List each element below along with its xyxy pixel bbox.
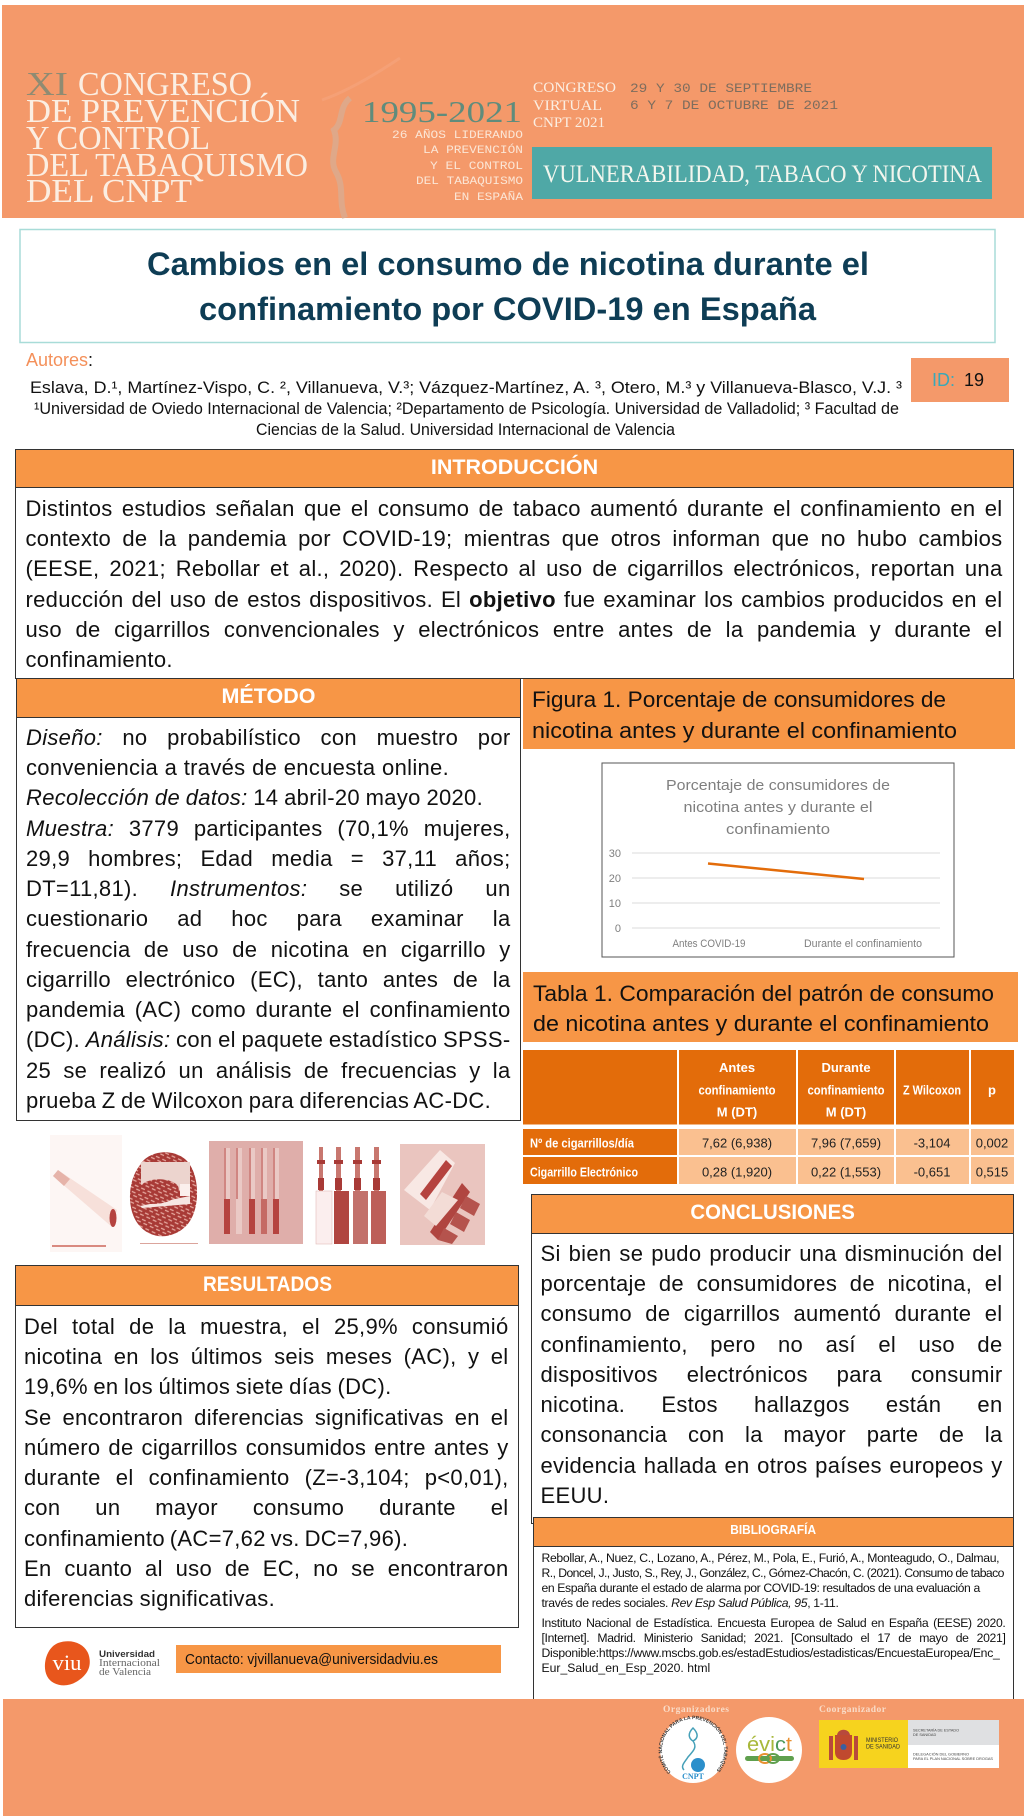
header banner — [2, 5, 1024, 218]
chart axis labels: 20 — [609, 873, 621, 885]
table data: 0,22 (1,553) — [811, 1164, 881, 1180]
viu university logo: Internacional — [99, 1658, 160, 1669]
table header row: confinamiento — [698, 1082, 776, 1098]
text: resultados: durante el confinamiento (Z=-3,104; p<0,01), — [24, 1465, 508, 1490]
text: introducción: uso de cigarrillos convencionales y electrónicos entre antes de la pandemia y durante el — [26, 617, 1002, 642]
banner years — [362, 94, 523, 204]
logo: CNPT — [658, 1716, 728, 1783]
text: método: pandemia (AC) como durante el confinamiento — [26, 997, 510, 1022]
id box — [911, 358, 1009, 402]
text: conclusiones: evidencia hallada en otros países europeos y — [540, 1453, 1002, 1478]
text: references: en España durante el estado de alarma por COVID-19: resultados de una evaluación a — [542, 1580, 980, 1594]
panel: conclusiones — [531, 1194, 1014, 1524]
banner theme box: VULNERABILIDAD, TABACO Y NICOTINA — [543, 161, 982, 188]
text: introducción: confinamiento. — [26, 647, 173, 672]
logo: evict: évict — [747, 1734, 792, 1756]
chart title: confinamiento — [726, 821, 830, 838]
contact box: Contacto: vjvillanueva@universidadviu.es — [185, 1651, 438, 1668]
text: references: Eur_Salud_en_Esp_2020. html — [542, 1660, 710, 1674]
figure caption: nicotina antes y durante el confinamiento — [532, 718, 957, 743]
heading: bibliografía — [534, 1518, 1013, 1547]
authors — [26, 350, 902, 439]
chart title — [666, 777, 890, 838]
photo: vape pens — [209, 1141, 303, 1244]
panel: resultados — [15, 1265, 519, 1628]
table header row: Antes — [719, 1060, 755, 1075]
text: resultados: Del total de la muestra, el 25,9% consumió — [24, 1314, 508, 1339]
product photos — [50, 1135, 485, 1252]
heading: método: MÉTODO — [222, 684, 315, 708]
text: método: conveniencia a través de encuesta online. — [26, 755, 449, 780]
text: conclusiones: Si bien se pudo producir una disminución del — [540, 1241, 1002, 1266]
chart axis labels — [609, 848, 922, 950]
chart axis labels: 0 — [615, 923, 621, 935]
chart title: Porcentaje de consumidores de — [666, 777, 890, 794]
text: introducción: reducción del uso de estos dispositivos. El objetivo fue examinar los cambios producidos en el — [26, 587, 1002, 612]
authors: Eslava, D.¹, Martínez-Vispo, C. ², Villanueva, V.³; Vázquez-Martínez, A. ³, Otero, M.³ y Villanueva-Blasco, V.J. ³ — [30, 378, 902, 397]
banner virtual congress dates — [533, 80, 838, 131]
coat of arms — [829, 1730, 858, 1760]
text: método: cuestionario ad hoc para examinar la — [26, 906, 510, 931]
heading: conclusiones — [532, 1195, 1013, 1234]
chart title: nicotina antes y durante el — [684, 799, 872, 816]
footer headings — [663, 1705, 887, 1715]
text: introducción — [26, 496, 1002, 672]
banner virtual congress dates: 29 Y 30 DE SEPTIEMBRE — [630, 81, 812, 96]
text: references: Rebollar, A., Nuez, C., Lozano, A., Pérez, M., Pola, E., Furió, A., Monteagudo, O., Dalmau, — [542, 1550, 999, 1564]
chart axis labels: Antes COVID-19 — [672, 938, 746, 950]
logo: ministerio de sanidad: MINISTERIO — [866, 1737, 898, 1744]
heading: resultados — [16, 1266, 518, 1306]
viu university logo — [45, 1641, 160, 1685]
table header row: p — [988, 1082, 996, 1098]
panel: introducción — [15, 449, 1014, 679]
text: resultados: Se encontraron diferencias significativas en el — [24, 1405, 508, 1430]
logo: ministerio de sanidad: PARA EL PLAN NACIONAL SOBRE DROGAS — [913, 1757, 993, 1761]
logo: ministerio de sanidad: DELEGACIÓN DEL GOBIERNO — [913, 1752, 969, 1756]
text: resultados: con un mayor consumo durante el — [24, 1495, 508, 1520]
text: references — [542, 1550, 1006, 1674]
table data: -0,651 — [914, 1164, 950, 1180]
table caption — [523, 972, 1018, 1042]
banner congress title: CONGRESO — [78, 66, 252, 103]
banner congress title: Y CONTROL — [26, 120, 210, 157]
banner congress title: XI — [26, 66, 68, 103]
text: references: [Internet]. Madrid. Ministerio Sanidad; 2021. [Consultado el 17 de mayo de 2021] — [542, 1630, 1006, 1644]
table caption: de nicotina antes y durante el confinamiento — [533, 1011, 989, 1036]
text: references: R., Doncel, J., Justo, S., Rey, J., González, C., Gómez-Chacón, C. (2021). Consumo de tabaco — [542, 1566, 1004, 1580]
photo: pod device kit — [400, 1144, 485, 1245]
text: references: Instituto Nacional de Estadística. Encuesta Europea de Salud en España (EESE) 2020. — [542, 1616, 1006, 1630]
heading: introducción: INTRODUCCIÓN — [431, 455, 598, 479]
text: conclusiones: dispositivos electrónicos para consumir — [540, 1362, 1002, 1387]
heading: bibliografía: BIBLIOGRAFÍA — [731, 1523, 816, 1537]
text: introducción: (EESE, 2021; Rebollar et al., 2020). Respecto al uso de cigarrillos electrónicos, reportan una — [26, 556, 1002, 581]
text: resultados — [24, 1314, 508, 1611]
banner congress title: DEL TABAQUISMO — [26, 147, 308, 184]
contact box — [176, 1645, 501, 1673]
photo: vape mods — [316, 1147, 386, 1244]
data line — [708, 864, 864, 879]
figure caption — [523, 679, 1015, 749]
text: resultados: En cuanto al uso de EC, no se encontraron — [24, 1556, 508, 1581]
viu university logo: de Valencia — [99, 1667, 152, 1678]
id box: 19 — [964, 370, 984, 390]
table header row: M (DT) — [717, 1104, 757, 1120]
logo: CNPT: CNPT — [682, 1772, 705, 1781]
text: método: Muestra: 3779 participantes (70,1% mujeres, — [26, 816, 510, 841]
logo: ministerio de sanidad: DE SANIDAD — [913, 1733, 936, 1737]
title: confinamiento por COVID-19 en España — [199, 291, 816, 327]
logo: ministerio de sanidad — [819, 1720, 999, 1768]
id box: ID: — [932, 370, 955, 390]
title: Cambios en el consumo de nicotina durante el — [147, 246, 869, 282]
table row labels: Cigarrillo Electrónico — [530, 1164, 638, 1180]
title — [20, 230, 995, 342]
banner years: 1995-2021 — [362, 94, 522, 129]
chart axis labels: 30 — [609, 848, 621, 860]
table header row: confinamiento — [808, 1082, 885, 1098]
banner congress title: DE PREVENCIÓN — [26, 92, 300, 130]
text: método: Recolección de datos: 14 abril-20 mayo 2020. — [26, 785, 483, 810]
text: conclusiones: EEUU. — [540, 1483, 609, 1508]
text: método: cigarrillo electrónico (EC), tanto antes de la — [26, 967, 510, 992]
logo: ministerio de sanidad: DE SANIDAD — [866, 1744, 900, 1750]
panel: método — [16, 678, 521, 1121]
logo: CNPT: COMITÉ NACIONAL PARA LA PREVENCIÓN DEL TABAQUISMO — [658, 1716, 728, 1774]
text: conclusiones: consonancia con la mayor parte de la — [540, 1422, 1002, 1447]
heading: resultados: RESULTADOS — [203, 1272, 331, 1296]
text: método: prueba Z de Wilcoxon para diferencias AC-DC. — [26, 1088, 491, 1113]
figure caption: Figura 1. Porcentaje de consumidores de — [532, 687, 946, 712]
banner virtual congress dates: CONGRESO — [533, 80, 616, 96]
panel: bibliografía — [533, 1517, 1014, 1707]
text: references: través de redes sociales. Rev Esp Salud Pública, 95, 1-11. — [542, 1596, 839, 1610]
table data: 7,96 (7,659) — [811, 1136, 881, 1151]
text: conclusiones — [540, 1241, 1002, 1508]
table row labels: Nº de cigarrillos/día — [530, 1136, 635, 1151]
heading: introducción — [16, 450, 1013, 488]
table data — [702, 1136, 1008, 1180]
text: conclusiones: porcentaje de consumidores de nicotina, el — [540, 1271, 1002, 1296]
footer headings: Coorganizador — [819, 1705, 887, 1715]
text: método: 29,9 hombres; Edad media = 37,11 años; — [26, 846, 510, 871]
authors: Ciencias de la Salud. Universidad Internacional de Valencia — [256, 421, 676, 439]
text: método: Diseño: no probabilístico con muestro por — [26, 725, 510, 750]
heading: conclusiones: CONCLUSIONES — [690, 1200, 855, 1224]
text: método — [26, 725, 510, 1113]
viu university logo: viu — [52, 1650, 82, 1675]
chart axis labels: 10 — [609, 898, 621, 910]
table data: -3,104 — [914, 1136, 950, 1151]
table header row — [698, 1060, 996, 1120]
heading: método — [17, 679, 520, 718]
table caption: Tabla 1. Comparación del patrón de consumo — [533, 981, 994, 1006]
banner years: LA PREVENCIÓN — [423, 143, 523, 157]
text: resultados: diferencias significativas. — [24, 1586, 275, 1611]
photo: cigarette — [50, 1135, 122, 1252]
text: resultados: número de cigarrillos consumidos entre antes y — [24, 1435, 508, 1460]
table header row: M (DT) — [826, 1104, 866, 1120]
text: método: frecuencia de uso de nicotina en cigarrillo y — [26, 937, 510, 962]
table data: 0,28 (1,920) — [702, 1164, 772, 1180]
text: resultados: 19,6% en los últimos siete días (DC). — [24, 1374, 392, 1399]
banner theme box — [532, 147, 992, 199]
text: resultados: confinamiento (AC=7,62 vs. DC=7,96). — [24, 1526, 408, 1551]
banner congress title: DEL CNPT — [26, 173, 192, 210]
line chart — [602, 763, 954, 957]
chart axis labels: Durante el confinamiento — [804, 938, 922, 950]
footer headings: Organizadores — [663, 1705, 729, 1715]
text: introducción: contexto de la pandemia por COVID-19; mientras que otros informan que no hubo cambios — [26, 526, 1002, 551]
viu university logo: Universidad — [99, 1649, 155, 1660]
table data: 0,515 — [976, 1164, 1008, 1180]
banner years: EN ESPAÑA — [454, 191, 523, 204]
text: método: DT=11,81). Instrumentos: se utilizó un — [26, 876, 510, 901]
text: resultados: nicotina en los últimos seis meses (AC), y el — [24, 1344, 508, 1369]
text: método: (DC). Análisis: con el paquete estadístico SPSS- — [26, 1027, 510, 1052]
banner virtual congress dates: CNPT 2021 — [533, 115, 605, 131]
banner virtual congress dates: VIRTUAL — [533, 98, 602, 114]
logo: evict — [736, 1717, 802, 1783]
table row labels — [530, 1136, 638, 1180]
text: conclusiones: confinamiento, pero no así el uso de — [540, 1332, 1002, 1357]
table data: 7,62 (6,938) — [702, 1136, 772, 1151]
text: references: Disponible:https://www.mscbs.gob.es/estadEstudios/estadisticas/EncuestaEuropea/Enc_ — [542, 1646, 1000, 1660]
text: método: 25 se realizó un análisis de frecuencias y la — [26, 1058, 510, 1083]
text: conclusiones: consumo de cigarrillos aumentó durante el — [540, 1301, 1002, 1326]
text: conclusiones: nicotina. Estos hallazgos están en — [540, 1392, 1002, 1417]
banner years: Y EL CONTROL — [430, 161, 523, 173]
photo: rolling tobacco — [130, 1152, 198, 1244]
table header row: Durante — [821, 1060, 871, 1075]
banner years: 26 AÑOS LIDERANDO — [392, 129, 523, 142]
text: introducción: Distintos estudios señalan que el consumo de tabaco aumentó durante el confinamiento en el — [26, 496, 1002, 521]
comparison table — [523, 1050, 1014, 1184]
banner congress title — [26, 66, 308, 210]
banner virtual congress dates: 6 Y 7 DE OCTUBRE DE 2021 — [630, 98, 838, 113]
banner years: DEL TABAQUISMO — [416, 176, 523, 188]
authors: ¹Universidad de Oviedo Internacional de Valencia; ²Departamento de Psicología. Universidad de Valladolid; ³ Facultad de — [34, 400, 899, 418]
table data: 0,002 — [976, 1136, 1008, 1151]
logo: ministerio de sanidad: SECRETARÍA DE ESTADO — [913, 1728, 959, 1732]
table header row: Z Wilcoxon — [903, 1082, 961, 1098]
authors: Autores: — [26, 350, 93, 370]
